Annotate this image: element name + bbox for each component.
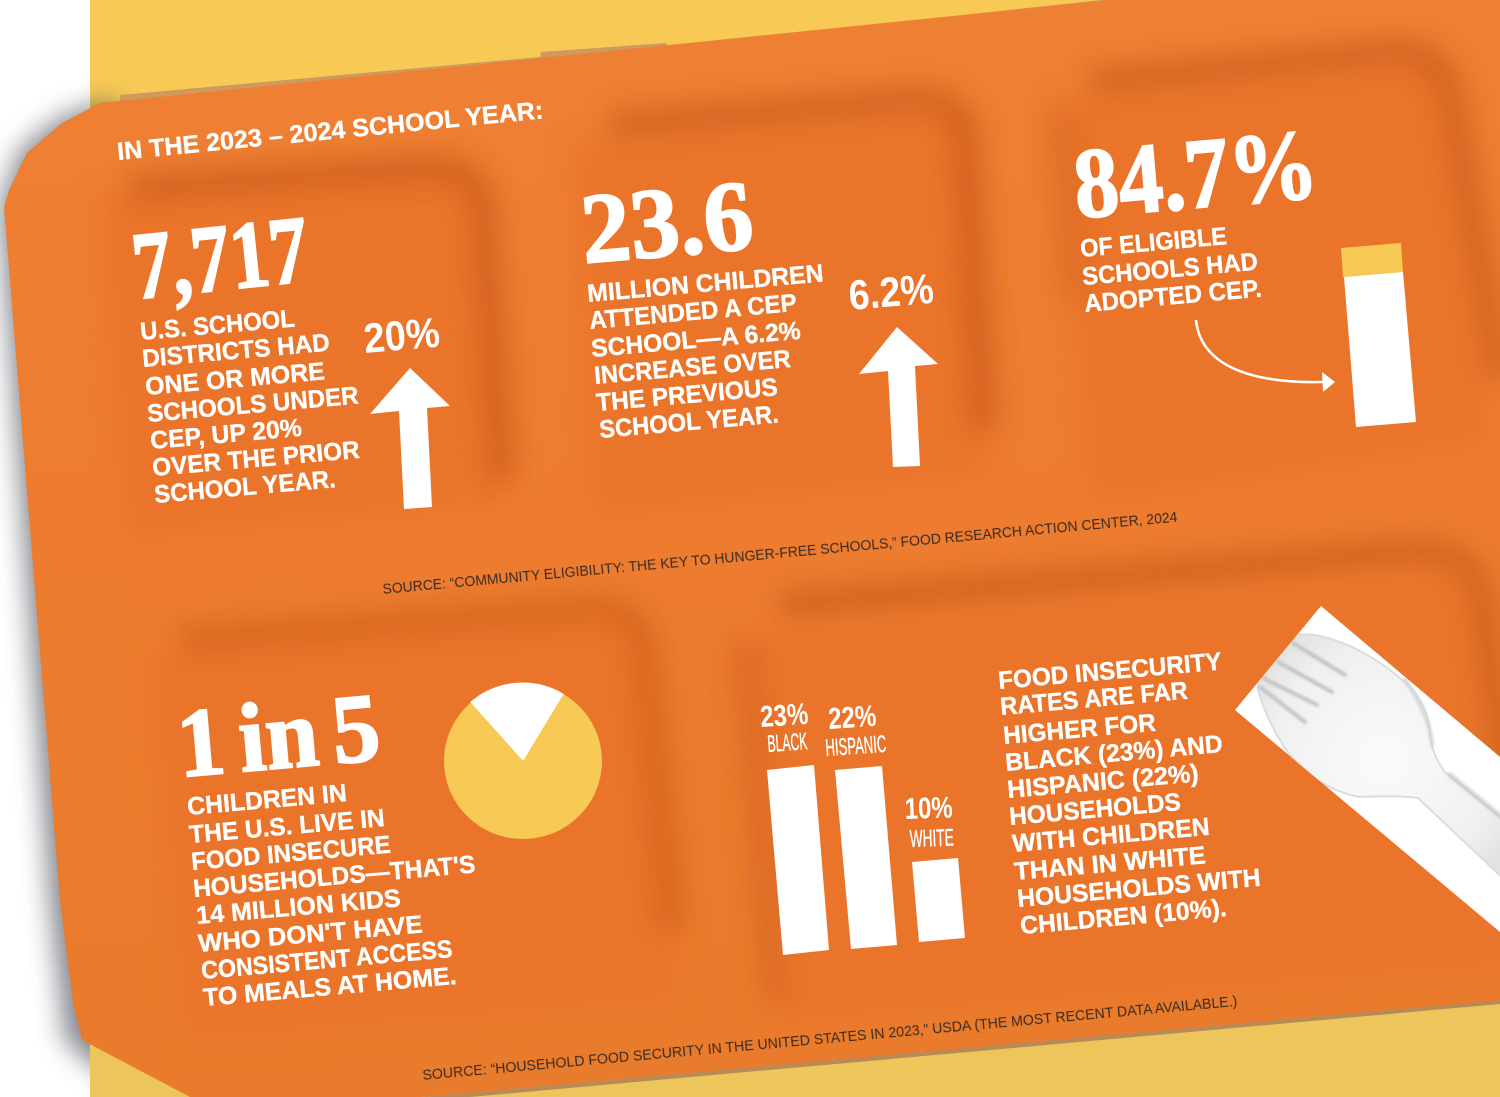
bottom yellow strip under tray	[90, 1000, 1500, 1097]
text: adoption description: OF ELIGIBLE	[1079, 222, 1228, 263]
stat: 1 in 5: 1 in 5	[173, 674, 384, 799]
text: food insecure description: THE U.S. LIVE IN	[188, 804, 386, 849]
stat: 84.7%	[1069, 108, 1322, 318]
text: food insecurity rates: FOOD INSECURITY	[997, 648, 1223, 695]
source line 1: SOURCE: “COMMUNITY ELIGIBILITY: THE KEY TO HUNGER-FREE SCHOOLS,” FOOD RESEARCH ACTION CENTER, 2024	[382, 509, 1178, 598]
text: food insecurity rates: THAN IN WHITE	[1013, 841, 1207, 886]
text: food insecure description: WHO DON'T HAVE	[197, 910, 424, 958]
stat: 84.7%: 84.7%	[1069, 108, 1322, 240]
text: food insecurity rates	[997, 648, 1262, 940]
bar: White 10%: 10%	[904, 791, 953, 826]
text: children description: ATTENDED A CEP	[588, 289, 798, 335]
text: adoption description: ADOPTED CEP.	[1083, 275, 1263, 318]
text: adoption description	[1079, 222, 1263, 318]
text: districts description: SCHOOL YEAR.	[153, 465, 337, 509]
text: food insecurity rates: RATES ARE FAR	[999, 677, 1189, 721]
text: children description: INCREASE OVER	[593, 345, 792, 390]
text: food insecure description	[186, 779, 476, 1012]
text: districts description: OVER THE PRIOR	[151, 436, 361, 482]
stat: 1 in 5	[173, 674, 476, 1012]
text: districts description: U.S. SCHOOL	[139, 305, 296, 346]
text: districts description: ONE OR MORE	[144, 357, 326, 401]
tray rim highlight	[120, 0, 1120, 108]
bar: Black 23%	[759, 698, 829, 955]
bottom tray rim	[421, 999, 1500, 1097]
text: children description: SCHOOL YEAR.	[598, 400, 780, 444]
text: children description: THE PREVIOUS	[595, 373, 779, 417]
stat: 7,717 districts: 7,717	[127, 195, 313, 320]
stat: 7,717 districts	[127, 195, 361, 509]
bar: Hispanic 22%: HISPANIC	[825, 731, 887, 762]
icon: plastic spork in wrapper	[1235, 606, 1500, 932]
text: food insecure description: 14 MILLION KIDS	[195, 884, 402, 930]
text: children description	[586, 259, 825, 444]
text: food insecure description: CHILDREN IN	[186, 779, 348, 821]
bar: White 10%	[904, 791, 965, 942]
text: food insecure description: CONSISTENT ACCESS	[200, 935, 454, 985]
bar chart: food insecurity by race	[759, 698, 965, 955]
text: food insecurity rates: HOUSEHOLDS	[1008, 788, 1182, 831]
text: food insecure description: HOUSEHOLDS—THAT'S	[192, 850, 476, 903]
pie chart: 1 in 5	[444, 683, 602, 839]
arrow: up 6.2%	[859, 327, 938, 467]
text: food insecure description: FOOD INSECURE	[190, 831, 392, 876]
text: food insecurity rates: BLACK (23%) AND	[1004, 730, 1224, 777]
text: food insecurity rates: HOUSEHOLDS WITH	[1016, 864, 1262, 913]
callout: 20%: 20%	[362, 309, 441, 362]
heading: IN THE 2023 – 2024 SCHOOL YEAR:	[116, 96, 545, 166]
text: districts description: CEP, UP 20%	[149, 414, 303, 455]
bar: Black 23%: BLACK	[767, 728, 808, 758]
arrow: up 20%	[370, 368, 450, 509]
text: children description: SCHOOL—A 6.2%	[590, 317, 802, 363]
bar: Hispanic 22%	[825, 700, 897, 949]
text: adoption description: SCHOOLS HAD	[1081, 248, 1259, 291]
text: food insecurity rates: CHILDREN (10%).	[1019, 894, 1228, 940]
text: districts description: SCHOOLS UNDER	[146, 382, 360, 428]
text: food insecurity rates: WITH CHILDREN	[1011, 813, 1211, 858]
bar: 84.7% adoption	[1341, 243, 1416, 427]
text: children description: MILLION CHILDREN	[586, 259, 825, 308]
bar: Black 23%: 23%	[759, 698, 809, 734]
stat: 23.6 million: 23.6	[576, 159, 757, 285]
callout: 6.2%: 6.2%	[847, 265, 935, 319]
source line 2: SOURCE: “HOUSEHOLD FOOD SECURITY IN THE UNITED STATES IN 2023,” USDA (THE MOST RECENT DATA AVAILABLE.)	[422, 993, 1238, 1084]
text: food insecure description: TO MEALS AT HOME.	[202, 962, 458, 1012]
stat: 23.6 million	[576, 159, 825, 444]
text: districts description: DISTRICTS HAD	[141, 329, 331, 373]
bar: White 10%: WHITE	[909, 824, 954, 853]
text: food insecurity rates: HIGHER FOR	[1002, 709, 1157, 750]
text: districts description	[139, 305, 361, 509]
arrow: curved pointer to bar	[1196, 320, 1335, 392]
text: food insecurity rates: HISPANIC (22%)	[1006, 759, 1200, 804]
tray drop shadow	[0, 100, 250, 1097]
bar: Hispanic 22%: 22%	[827, 700, 877, 736]
